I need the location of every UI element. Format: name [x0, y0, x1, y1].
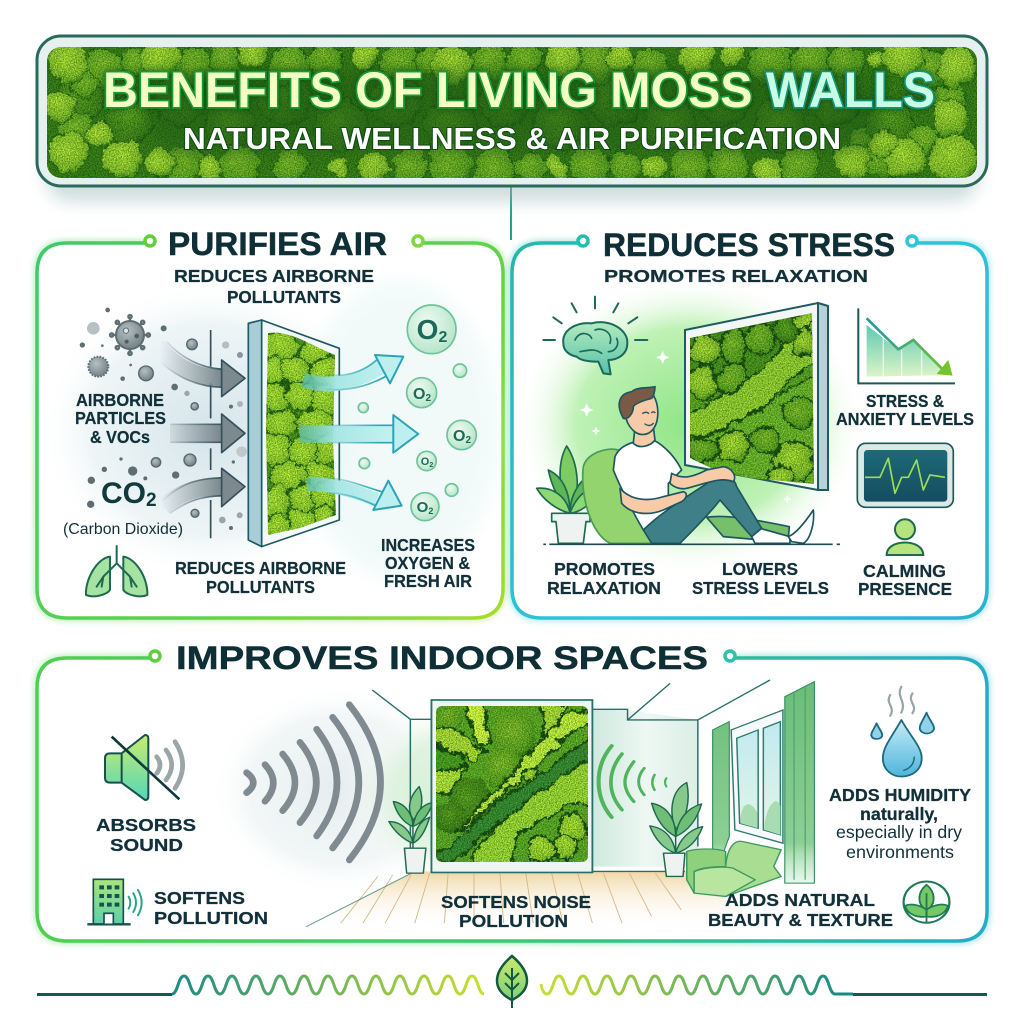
green glow — [515, 275, 865, 575]
moss texture — [47, 47, 977, 178]
label: promotes relaxation: PROMOTES — [554, 559, 655, 579]
O2 labels: 2 — [429, 462, 433, 469]
label: CO2: 2 — [146, 490, 157, 511]
label: lowers stress — [692, 559, 829, 598]
curtains — [713, 682, 814, 883]
title: BENEFITS OF LIVING MOSS WALLS — [103, 62, 935, 118]
icon: virus — [88, 315, 150, 377]
label: softens noise: SOFTENS NOISE — [441, 892, 591, 912]
moss wall — [436, 706, 588, 862]
icon: brain — [543, 297, 647, 374]
moss wall frame — [248, 320, 339, 547]
label: CO2: CO — [101, 477, 146, 510]
label: reduces pollutants: POLLUTANTS — [206, 577, 315, 597]
filter dashes — [208, 330, 213, 538]
label: stress and anxiety: ANXIETY LEVELS — [836, 409, 974, 429]
panel frame — [512, 243, 987, 618]
icon: leaf circle — [904, 881, 949, 923]
arrow: polluted air in — [153, 342, 245, 513]
icon: leaf — [497, 956, 527, 1008]
label: adds humidity — [829, 785, 971, 862]
panel frame — [37, 658, 987, 941]
label: softens noise — [441, 892, 591, 931]
label: softens pollution: SOFTENS — [154, 888, 245, 908]
label: reduces pollutants — [175, 558, 346, 597]
wave right — [541, 976, 853, 994]
label: lowers stress: STRESS LEVELS — [692, 578, 829, 598]
line left — [37, 993, 172, 996]
plant left — [389, 787, 433, 873]
heading: REDUCES STRESS — [603, 227, 895, 263]
label: airborne particles: PARTICLES — [75, 408, 166, 428]
panel frame — [37, 243, 503, 618]
icon: heart monitor — [857, 443, 953, 507]
label: increases oxygen: FRESH AIR — [384, 571, 472, 591]
label: CO2 — [63, 477, 183, 538]
heading: PURIFIES AIR — [168, 226, 387, 262]
room walls and floor — [592, 710, 698, 866]
room haze — [210, 685, 470, 895]
label: stress and anxiety: STRESS & — [866, 391, 944, 411]
label: airborne particles: AIRBORNE — [76, 390, 164, 410]
panel: purifies air — [37, 226, 503, 618]
subheading — [174, 266, 374, 307]
label: reduces pollutants: REDUCES AIRBORNE — [175, 558, 346, 578]
label: adds humidity: ADDS HUMIDITY — [829, 785, 971, 805]
O2 labels: O — [453, 428, 465, 445]
sofa — [687, 841, 781, 896]
label: adds humidity: naturally, — [860, 804, 938, 824]
O2 labels: O — [417, 499, 428, 516]
wave left — [172, 976, 484, 994]
label: adds natural beauty: BEAUTY & TEXTURE — [708, 910, 893, 930]
subtitle: NATURAL WELLNESS & AIR PURIFICATION — [183, 121, 841, 156]
label: calming presence: CALMING — [863, 561, 946, 581]
label: airborne particles — [75, 390, 166, 447]
label: softens pollution — [154, 888, 268, 928]
particle haze — [40, 280, 380, 580]
label: promotes relaxation — [547, 559, 661, 598]
illustration: air flow through moss wall — [80, 308, 339, 547]
O2 labels: 2 — [465, 435, 471, 446]
label: adds natural beauty — [708, 890, 893, 930]
particles — [80, 308, 247, 530]
icon: water drops — [871, 713, 934, 777]
label: increases oxygen: INCREASES — [381, 535, 475, 555]
person relaxing — [583, 387, 814, 543]
label: adds humidity: especially in dry — [836, 822, 962, 842]
oxygen bubbles — [358, 305, 476, 521]
icon: steam — [889, 687, 914, 716]
O2 labels: O — [421, 456, 429, 468]
label: absorbs sound: SOUND — [110, 835, 183, 855]
O2 labels: O — [413, 386, 425, 403]
label: increases oxygen: OXYGEN & — [385, 553, 470, 573]
label: softens noise: POLLUTION — [459, 911, 568, 931]
panel: improves indoor spaces — [37, 640, 987, 941]
panel: reduces stress — [512, 227, 987, 618]
O2 labels — [413, 314, 471, 516]
icon: muted speaker — [105, 735, 183, 800]
label: calming presence — [858, 561, 952, 599]
label: stress and anxiety — [836, 391, 974, 429]
O2 labels: 2 — [428, 506, 433, 516]
sound waves: softened — [599, 746, 666, 817]
O2 labels: 2 — [425, 393, 431, 404]
chart: stress levels — [858, 308, 955, 383]
label: softens pollution: POLLUTION — [154, 908, 268, 928]
moss frame — [431, 700, 592, 872]
room scene — [306, 680, 814, 927]
window — [731, 710, 783, 843]
subheading: REDUCES AIRBORNE — [174, 266, 374, 286]
footer divider — [37, 956, 987, 1008]
label: calming presence: PRESENCE — [858, 579, 952, 599]
label: lowers stress: LOWERS — [722, 559, 798, 579]
sound waves: noise — [247, 705, 380, 860]
header banner — [20, 20, 1004, 205]
label: adds natural beauty: ADDS NATURAL — [725, 890, 875, 910]
label: absorbs sound: ABSORBS — [96, 815, 196, 835]
O2 labels: O — [417, 314, 438, 345]
label: absorbs sound — [96, 815, 196, 855]
plant — [537, 446, 602, 543]
moss wall — [266, 332, 336, 535]
label: increases oxygen — [381, 535, 475, 591]
moss wall — [684, 302, 829, 491]
icon: person — [887, 519, 923, 555]
icon: lungs — [86, 546, 147, 596]
line right — [853, 993, 987, 996]
label: airborne particles: & VOCs — [90, 427, 150, 447]
label: promotes relaxation: RELAXATION — [547, 578, 661, 598]
subheading: PROMOTES RELAXATION — [604, 266, 868, 286]
label: adds humidity: environments — [846, 842, 954, 862]
O2 labels: 2 — [438, 329, 447, 346]
heading: IMPROVES INDOOR SPACES — [176, 640, 708, 676]
arrow: fresh air out — [300, 355, 418, 510]
sparkles — [580, 351, 792, 504]
ground line — [543, 542, 840, 547]
connector line — [510, 186, 512, 240]
icon: building — [87, 879, 142, 924]
plant right — [650, 783, 703, 876]
label: CO2: (Carbon Dioxide) — [63, 521, 183, 538]
subheading: POLLUTANTS — [227, 287, 341, 307]
